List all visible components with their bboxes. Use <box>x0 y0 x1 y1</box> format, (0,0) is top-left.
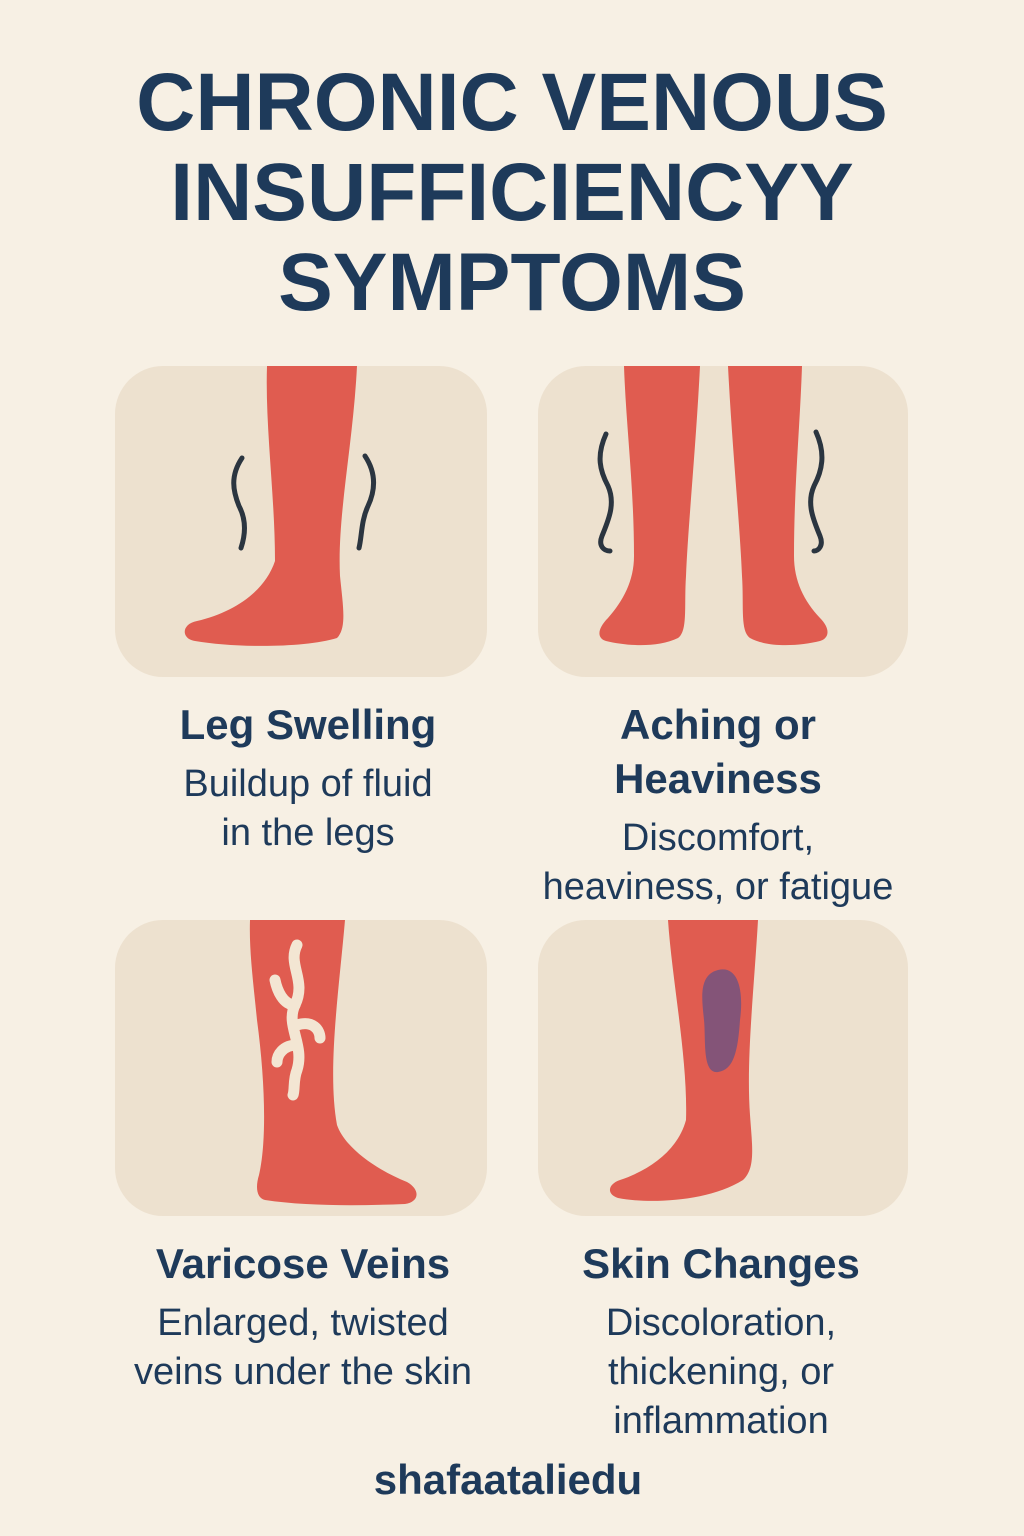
caption: aching: heaviness, or fatigue <box>543 866 893 908</box>
caption: skin changes: Discoloration, <box>606 1302 836 1344</box>
panel: aching <box>538 366 908 677</box>
caption: varicose veins: Varicose Veins <box>156 1240 450 1287</box>
title <box>136 57 888 328</box>
icon: swollen leg <box>185 366 357 646</box>
caption: aching: Aching or <box>620 701 816 748</box>
panel: leg swelling <box>115 366 487 677</box>
caption: skin changes <box>582 1240 860 1442</box>
caption: leg swelling: Leg Swelling <box>180 701 436 748</box>
panel: skin changes <box>538 920 908 1216</box>
caption: skin changes: Skin Changes <box>582 1240 860 1287</box>
icon: swelling lines <box>234 456 374 548</box>
caption: varicose veins: Enlarged, twisted <box>157 1302 449 1344</box>
caption: skin changes: thickening, or <box>608 1351 834 1393</box>
icon: leg with veins <box>250 920 417 1205</box>
footer credit: shafaataliedu <box>374 1456 642 1503</box>
title: SYMPTOMS <box>278 237 746 328</box>
caption: leg swelling: Buildup of fluid <box>183 763 433 805</box>
icon: two legs <box>599 366 828 645</box>
title: CHRONIC VENOUS <box>136 57 888 148</box>
caption: leg swelling <box>180 701 436 854</box>
caption: varicose veins: veins under the skin <box>134 1351 472 1393</box>
caption: leg swelling: in the legs <box>221 812 395 854</box>
caption: varicose veins <box>134 1240 472 1393</box>
title: INSUFFICIENCYY <box>170 147 854 238</box>
icon: leg with discoloration <box>610 920 758 1201</box>
caption: aching <box>543 701 893 908</box>
caption: aching: Heaviness <box>614 755 822 802</box>
caption: aching: Discomfort, <box>622 817 814 859</box>
caption: skin changes: inflammation <box>613 1400 829 1442</box>
icon: ache lines <box>600 432 822 551</box>
panel: varicose veins <box>115 920 487 1216</box>
